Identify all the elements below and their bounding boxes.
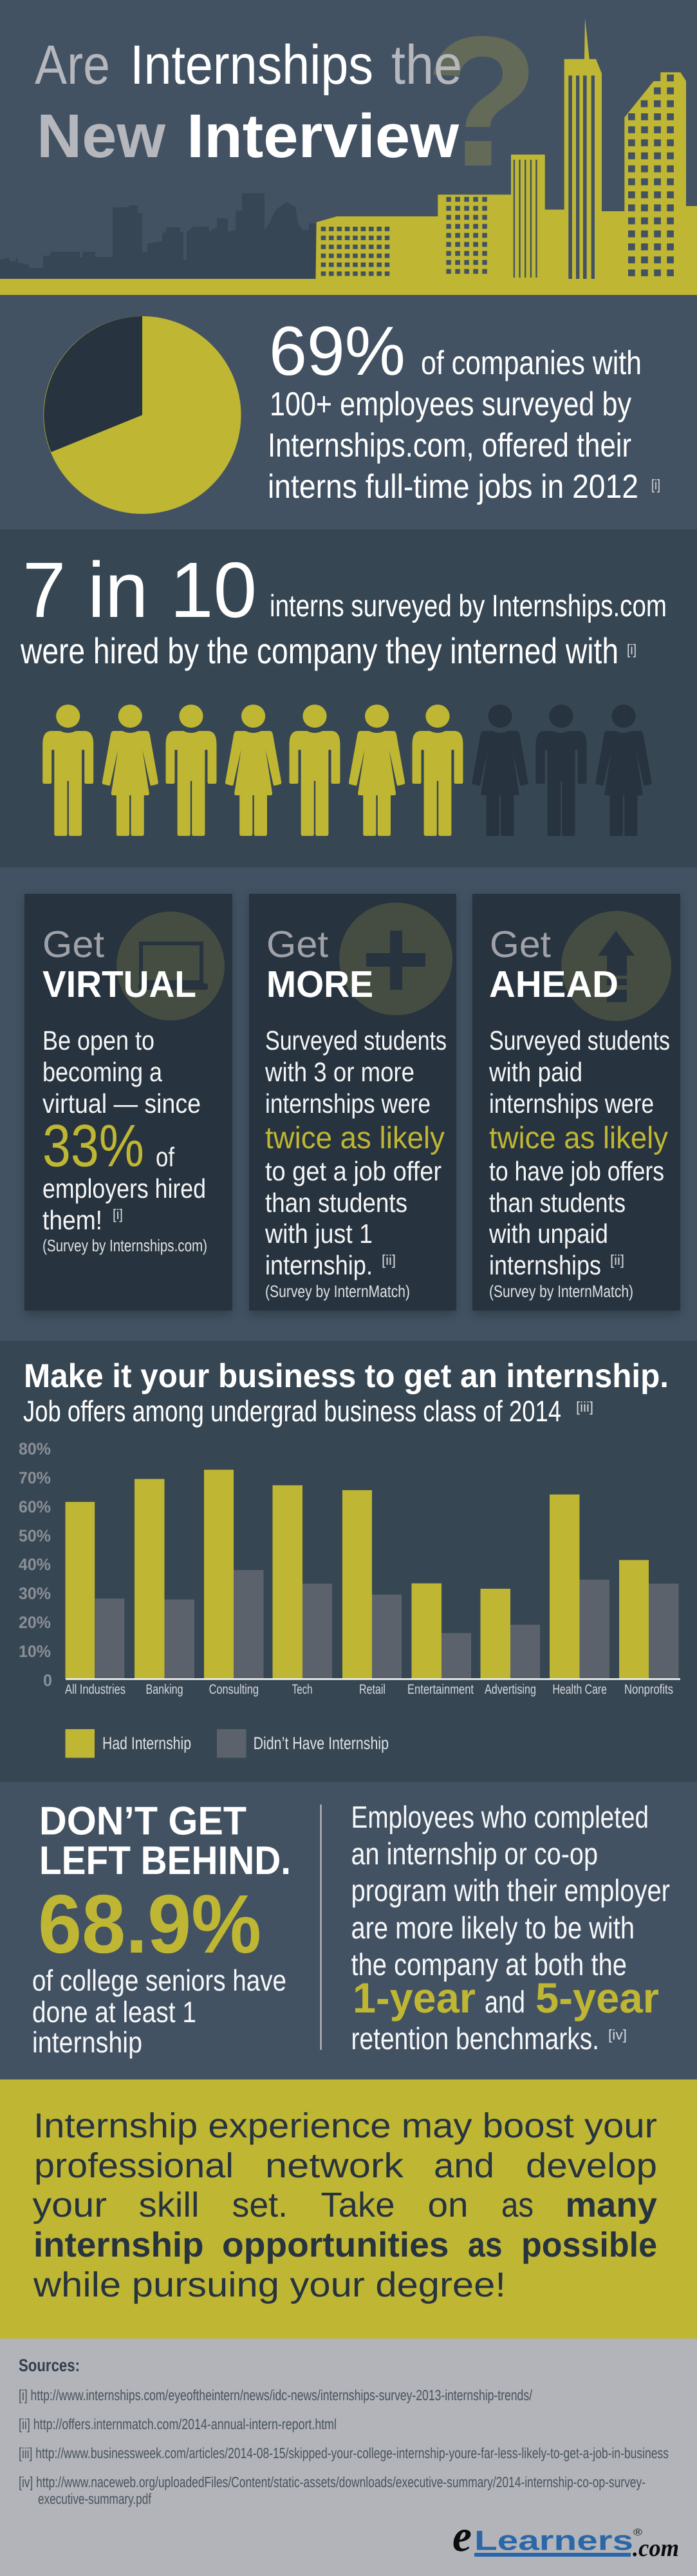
card: Get Ahead: with paid [488,1057,582,1087]
card: Get More: Get [266,923,328,965]
card: Get More: internship. [265,1250,373,1280]
logo: eLearners.com: e [452,2512,472,2561]
text: 68.9 percent: internship [32,2025,142,2059]
y axis labels: 80% [19,1439,51,1459]
logo: eLearners.com [452,2512,679,2562]
text: 69 percent of companies [268,312,660,506]
panel: header [0,0,697,295]
source list: executive-summary.pdf [38,2490,151,2507]
card: Get More: to get a job offer [265,1156,441,1186]
panel: business chart [0,1341,697,1782]
category labels: Entertainment [407,1682,474,1697]
card: Get Ahead: twice as likely [489,1121,668,1155]
y axis labels: 70% [19,1468,51,1488]
legend: Didn’t Have Internship [254,1734,389,1753]
card: Get Ahead: AHEAD [489,963,618,1005]
foreground yellow skyline [0,18,697,295]
text: 68.9 percent [32,1799,291,2059]
card: Get Ahead: [ii] [610,1252,624,1268]
chart heading: Make it your business to get an internship. [24,1358,669,1395]
card: Get Ahead: to have job offers [489,1156,664,1186]
card: Get Ahead: with unpaid [488,1218,608,1249]
call to action text: opportunities [222,2226,449,2264]
call to action text: as [468,2226,502,2264]
card: Get More: (Survey by InternMatch) [265,1282,410,1301]
y axis labels: 60% [19,1497,51,1516]
category labels: Tech [292,1682,313,1697]
call to action text [32,2107,657,2304]
text: 68.9 percent: done at least 1 [32,1995,196,2029]
card: Get Ahead: (Survey by InternMatch) [489,1282,633,1301]
no internship bars [95,1570,678,1679]
call to action text: professional [34,2146,234,2185]
card: Get More: with 3 or more [265,1057,414,1087]
title: the [391,34,462,96]
text: 68.9 percent: 68.9% [38,1878,261,1971]
call to action text: develop [526,2146,657,2185]
logo: eLearners.com: .com [633,2535,679,2562]
title: Interview [187,102,459,171]
text: 68.9 percent: LEFT BEHIND. [39,1839,291,1883]
card: Get More: with just 1 [265,1218,373,1249]
y axis labels: 0 [43,1671,52,1690]
text: 69 percent of companies: Internships.com, offered their [268,427,631,464]
card: Get More: internships were [265,1088,431,1119]
text: retention benchmarks: the company at both the [351,1948,627,1982]
y axis labels: 20% [19,1613,51,1632]
icon: question mark: ? [425,0,539,205]
call to action text: network [265,2146,404,2185]
card: Get More: MORE [266,963,373,1005]
text: retention benchmarks: [iv] [608,2027,627,2043]
pie chart [44,316,241,514]
y axis labels [19,1439,52,1690]
card: Get Virtual: them! [42,1205,102,1235]
text: retention benchmarks: are more likely to be with [351,1911,635,1946]
card: Get Virtual: Be open to [42,1025,154,1056]
call to action text: Take [321,2186,395,2224]
card: Get More: twice as likely [265,1121,445,1155]
legend [66,1729,389,1758]
source list [19,2387,669,2507]
card: Get Ahead: Get [490,923,551,965]
had internship bars [66,1470,649,1679]
card: Get Ahead: internships were [489,1088,654,1119]
card shadows [24,896,680,1315]
y axis labels: 30% [19,1584,51,1603]
text: 7 in 10 interns hired [20,546,667,671]
category labels: All Industries [65,1682,125,1697]
panel: call to action [0,2079,697,2339]
category labels [65,1682,673,1697]
card: Get More [249,894,456,1311]
icon: plus in circle [339,903,452,1015]
call to action text: your [32,2186,107,2224]
title: Are [35,34,110,96]
card: Get More: [ii] [382,1252,396,1268]
card: Get More: than students [265,1188,407,1218]
y axis labels: 10% [19,1642,51,1661]
text: retention benchmarks: 5-year [535,1974,659,2022]
card: Get Virtual: employers hired [42,1173,206,1204]
card: Get Virtual: [i] [113,1206,123,1222]
y axis labels: 50% [19,1526,51,1545]
call to action text: possible [521,2226,657,2264]
legend: Had Internship [102,1734,191,1753]
card: Get Ahead: than students [489,1188,626,1218]
text: 69 percent of companies: 100+ employees surveyed by [270,386,631,423]
text: retention benchmarks: 1-year [353,1974,476,2022]
text: 7 in 10 interns hired: 7 in 10 [23,546,257,634]
bar chart [19,1439,680,1697]
card: Get Virtual [24,894,232,1311]
source list: [i] http://www.internships.com/eyeoftheintern/news/idc-news/internships-survey-2013-internship-trends/ [19,2387,532,2403]
text: 7 in 10 interns hired: [i] [627,641,637,658]
logo: eLearners.com: Learners [474,2526,633,2557]
text: retention benchmarks: and [485,1985,525,2020]
sources heading: Sources: [19,2356,80,2375]
chart heading: [iii] [576,1399,593,1415]
call to action text: and [434,2146,494,2185]
category labels: Retail [359,1682,386,1697]
panel: sources [0,2339,697,2576]
card: Get Virtual: (Survey by Internships.com) [42,1236,207,1255]
text: 69 percent of companies: 69% [269,312,405,390]
call to action text: many [565,2186,657,2224]
category labels: Consulting [209,1682,259,1697]
chart heading [23,1358,669,1428]
card: Get Virtual: virtual — since [42,1088,201,1119]
card: Get Virtual: Get [42,923,104,965]
text: retention benchmarks: an internship or co-op [351,1837,598,1871]
logo: eLearners.com: ® [633,2527,642,2538]
card: Get Ahead [472,894,680,1311]
pictogram: ten people [42,705,652,836]
text: 69 percent of companies: [i] [651,477,660,493]
y axis labels: 40% [19,1555,51,1574]
call to action text: skill [139,2186,200,2224]
text: 68.9 percent: DON’T GET [39,1799,246,1844]
category labels: Advertising [485,1682,536,1697]
icon: monitor in circle [116,912,225,1020]
text: 69 percent of companies: interns full-time jobs in 2012 [268,468,638,506]
text: retention benchmarks [351,1801,670,2056]
text: retention benchmarks: retention benchmarks. [351,2022,599,2056]
card: Get Virtual: VIRTUAL [42,963,196,1005]
source list: [ii] http://offers.internmatch.com/2014-annual-intern-report.html [19,2416,337,2432]
text: 69 percent of companies: of companies with [421,345,642,382]
card: Get More: Surveyed students [265,1025,447,1056]
chart heading: Job offers among undergrad business class of 2014 [23,1394,561,1428]
title: New [37,102,165,171]
text: 68.9 percent: of college seniors have [32,1964,286,1997]
panel: don't get left behind [32,1799,670,2059]
card: Get Virtual: becoming a [42,1057,163,1087]
panel: three cards [24,894,680,1315]
card: Get Virtual: 33% [42,1112,144,1179]
category labels: Health Care [552,1682,607,1697]
call to action text: Internship experience may boost your [33,2107,657,2145]
category labels: Nonprofits [624,1682,673,1697]
call to action text: as [501,2186,534,2224]
title [35,34,462,171]
icon: up arrow in circle [561,911,671,1021]
call to action text: set. [232,2186,288,2224]
call to action text: on [427,2186,469,2224]
category labels: Banking [145,1682,183,1697]
panel: 69 percent [44,312,660,514]
panel: 7 in 10 [0,529,697,867]
title: Internships [130,34,373,96]
card: Get Ahead: internships [489,1250,601,1280]
background skyline silhouette [0,193,316,279]
card: Get Virtual: of [156,1142,174,1172]
call to action text: internship [33,2226,203,2264]
call to action text: while pursuing your degree! [33,2266,506,2304]
